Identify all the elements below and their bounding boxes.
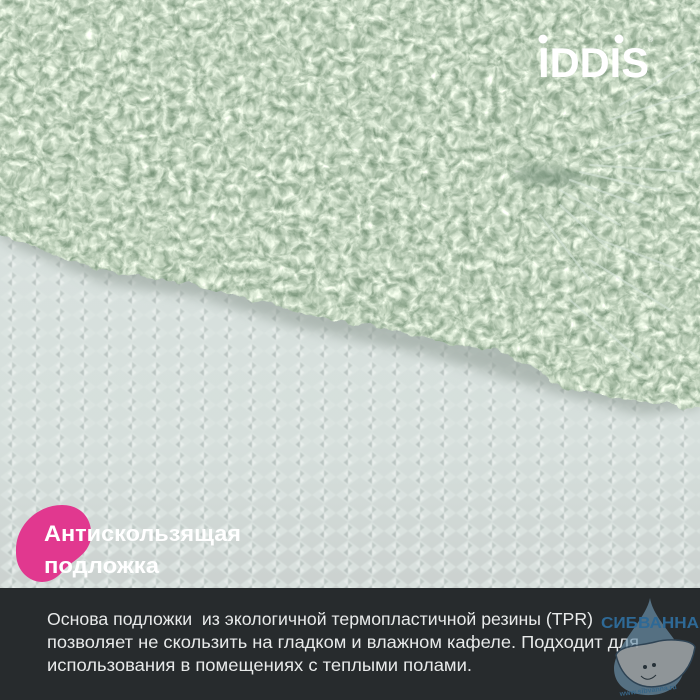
logo: iddis: IDDIS (538, 39, 649, 86)
fur shadow notch (510, 166, 581, 186)
fur strands on right edge (540, 60, 700, 360)
mat shadow (0, 220, 700, 414)
tub face (641, 663, 656, 679)
description text: использования в помещениях с теплыми полами. (47, 655, 472, 675)
bathtub (616, 640, 695, 687)
description text: позволяет не скользить на гладком и влажном кафеле. Подходит для (47, 632, 639, 652)
watermark url: www.sibvanna.ru (618, 684, 677, 698)
heading (44, 521, 241, 578)
water drop (614, 598, 684, 695)
fluffy green mat (0, 0, 700, 410)
rubber backing background (0, 230, 700, 590)
description text (47, 609, 639, 675)
watermark name: СИБВАННА (601, 615, 699, 632)
heading: подложка (44, 553, 160, 578)
dark description bar (0, 588, 700, 700)
watermark: sibvanna (601, 598, 699, 698)
logo: iddis: ® (648, 36, 654, 44)
pink blob (16, 505, 91, 582)
description text: Основа подложки из экологичной термопластичной резины (TPR) (47, 609, 593, 629)
heading: Антискользящая (44, 521, 241, 546)
